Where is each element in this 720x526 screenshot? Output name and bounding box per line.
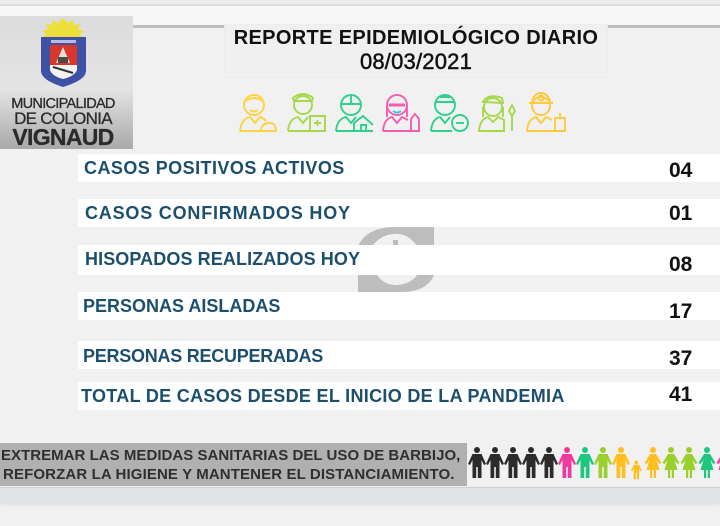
number: hisopados: 08 bbox=[669, 253, 692, 276]
top rule bbox=[133, 25, 720, 28]
message box: EXTREMAR LAS MEDIDAS SANITARIAS DEL USO DE BARBIJO, bbox=[1, 447, 460, 464]
row: hisopados realizados hoy bbox=[78, 245, 720, 275]
people row bbox=[468, 447, 720, 480]
message box bbox=[0, 443, 467, 486]
logo text bbox=[11, 96, 115, 150]
icon: builder green bbox=[336, 94, 373, 131]
title bbox=[234, 26, 598, 74]
label: casos positivos activos: CASOS POSITIVOS ACTIVOS bbox=[84, 158, 345, 178]
message box: REFORZAR LA HIGIENE Y MANTENER EL DISTANCIAMIENTO. bbox=[3, 466, 455, 483]
title: 08/03/2021 bbox=[360, 49, 472, 74]
row: total de casos bbox=[78, 382, 720, 410]
icon: guard green bbox=[431, 95, 468, 131]
icon: woman pink bbox=[383, 95, 420, 131]
number: recuperadas: 37 bbox=[669, 347, 692, 370]
label: total de casos: TOTAL DE CASOS DESDE EL INICIO DE LA PANDEMIA bbox=[81, 386, 565, 406]
logo text: DE COLONIA bbox=[14, 109, 112, 128]
logo panel bbox=[0, 16, 133, 149]
row: casos positivos activos bbox=[78, 154, 720, 182]
number: aisladas: 17 bbox=[669, 300, 692, 323]
icon: worker green with case bbox=[288, 94, 325, 131]
icon: municipal shield bbox=[41, 18, 86, 87]
label: personas recuperadas: PERSONAS RECUPERADAS bbox=[83, 346, 323, 366]
row: casos confirmados hoy bbox=[78, 199, 720, 227]
label: casos confirmados hoy: CASOS CONFIRMADOS HOY bbox=[85, 203, 351, 223]
title panel bbox=[224, 24, 608, 78]
icon: worker yellow bbox=[240, 95, 276, 131]
label: personas aisladas: PERSONAS AISLADAS bbox=[83, 296, 280, 316]
number: confirmados: 01 bbox=[669, 202, 692, 225]
bottom band bbox=[0, 487, 720, 503]
title: REPORTE EPIDEMIOLÓGICO DIARIO bbox=[234, 27, 598, 49]
row: personas recuperadas bbox=[78, 341, 720, 369]
icon: artist green bbox=[479, 96, 515, 131]
icon row: workers bbox=[239, 92, 566, 132]
label: hisopados realizados hoy: HISOPADOS REALIZADOS HOY bbox=[85, 249, 360, 269]
number: total: 41 bbox=[669, 383, 692, 406]
top band bbox=[0, 0, 720, 27]
icon: firefighter yellow bbox=[527, 93, 565, 131]
number: activos: 04 bbox=[669, 159, 692, 182]
row: personas aisladas bbox=[78, 292, 720, 320]
logo text: VIGNAUD bbox=[12, 124, 114, 150]
logo text: MUNICIPALIDAD bbox=[11, 96, 115, 112]
watermark: refresh icon bbox=[358, 227, 434, 292]
